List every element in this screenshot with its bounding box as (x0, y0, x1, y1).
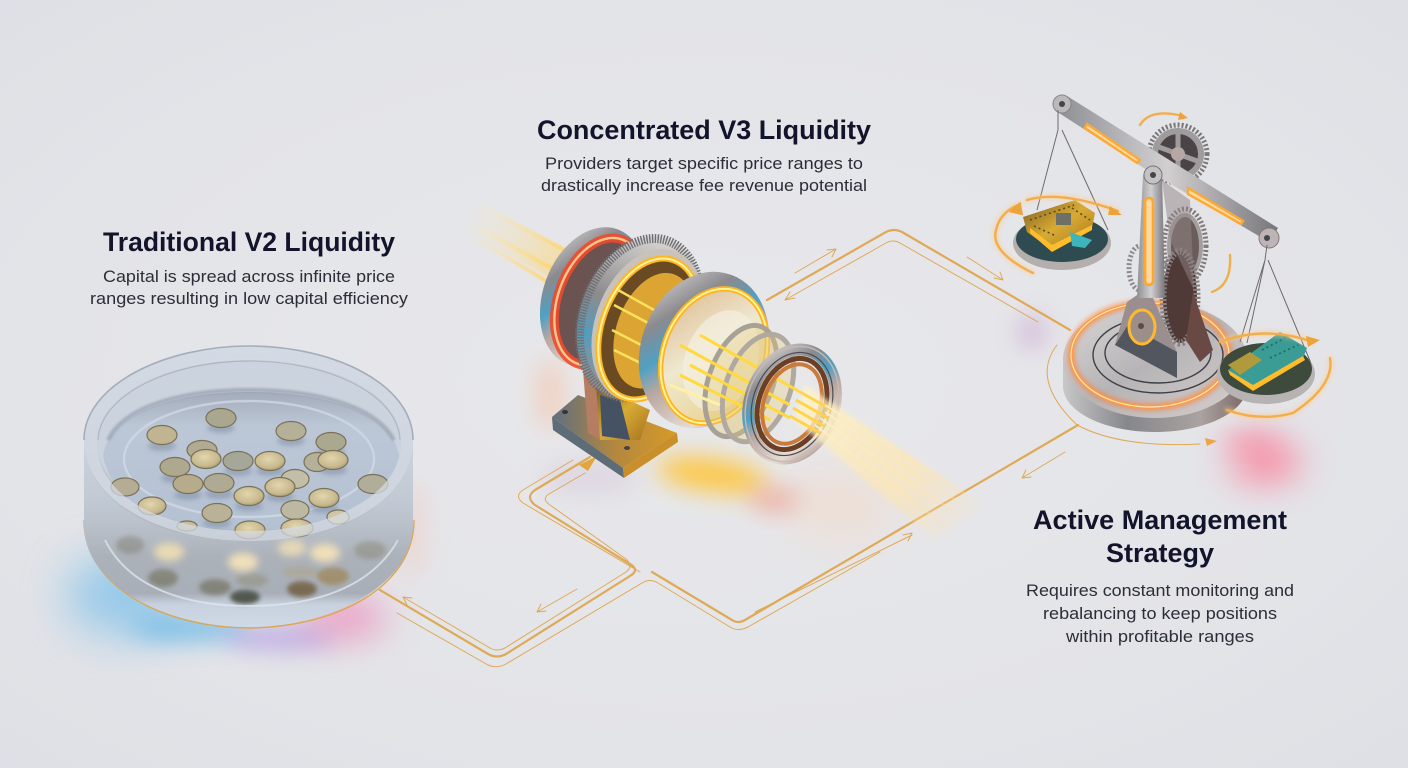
illustration: balance scale with gears and circuit boards (995, 95, 1331, 432)
dish footprint ring (84, 520, 414, 628)
description: Capital is spread across infinite price (103, 267, 395, 286)
dish outer body (84, 346, 413, 627)
thin orbit around scale base (1047, 345, 1200, 445)
heading (1033, 505, 1287, 568)
glass rings stepping down (691, 316, 807, 452)
description (90, 267, 409, 308)
stand pivot disc (1129, 310, 1155, 344)
right pan (1217, 245, 1315, 404)
beams within the lens (612, 290, 690, 380)
small arrows (403, 249, 1217, 612)
description: drastically increase fee revenue potential (541, 176, 867, 195)
rim of dish (84, 346, 413, 541)
mounting plate (552, 395, 677, 468)
colored floor glows (67, 314, 1301, 650)
description: ranges resulting in low capital efficiency (90, 289, 409, 308)
bright blurred coins through the wall (154, 540, 340, 571)
support post (581, 345, 600, 440)
heading: Strategy (1106, 538, 1214, 568)
rear red ring (521, 212, 665, 382)
heading: Traditional V2 Liquidity (103, 227, 395, 257)
outgoing light beam (790, 385, 985, 540)
dish inner well (97, 358, 401, 528)
description: within profitable ranges (1065, 627, 1254, 646)
front metal ring (730, 333, 854, 475)
flow line: thin upper (785, 241, 1038, 322)
illustration: concentrating lens assembly with light beams (468, 197, 985, 540)
neon ring on base (1071, 303, 1229, 407)
flow lines connecting the stages (380, 230, 1217, 667)
gears (1129, 125, 1207, 343)
flow line: lens base to scale (652, 425, 1078, 622)
heading block: Concentrated V3 Liquidity (537, 115, 871, 195)
flow line: lens to scale top (767, 230, 1070, 330)
beam streaks through glass (670, 335, 800, 420)
blurred coins seen through wall (116, 536, 386, 604)
balance beam (1057, 96, 1278, 242)
heading block: Traditional V2 Liquidity (90, 227, 409, 308)
heading block: Active Management Strategy (1026, 505, 1294, 646)
description (1026, 581, 1294, 646)
beam neon slots (1085, 124, 1243, 224)
description: Providers target specific price ranges to (545, 154, 863, 173)
stand body (1115, 293, 1177, 378)
coins (111, 408, 388, 539)
stand neon slot (1145, 198, 1153, 285)
incoming light beam (468, 197, 565, 282)
frosted front wall (84, 440, 413, 627)
water surface (103, 392, 399, 530)
left pan (1013, 110, 1111, 270)
heading: Concentrated V3 Liquidity (537, 115, 871, 145)
scale base (1063, 302, 1247, 432)
description (541, 154, 867, 195)
flow line: outer thin upper (518, 460, 640, 572)
rotating orange arrows (995, 112, 1331, 417)
flow line: dish to lens (380, 457, 635, 656)
lower lip highlight (105, 540, 398, 606)
illustration: glass dish with scattered coins (84, 346, 414, 628)
large glass ring (617, 253, 791, 447)
description: Requires constant monitoring and (1026, 581, 1294, 600)
description: rebalancing to keep positions (1043, 604, 1277, 623)
flow line: inner thin return (403, 473, 630, 650)
heading: Active Management (1033, 505, 1287, 535)
flow line: outer thin return (397, 552, 880, 667)
knurled ring with yellow neon (555, 219, 725, 417)
